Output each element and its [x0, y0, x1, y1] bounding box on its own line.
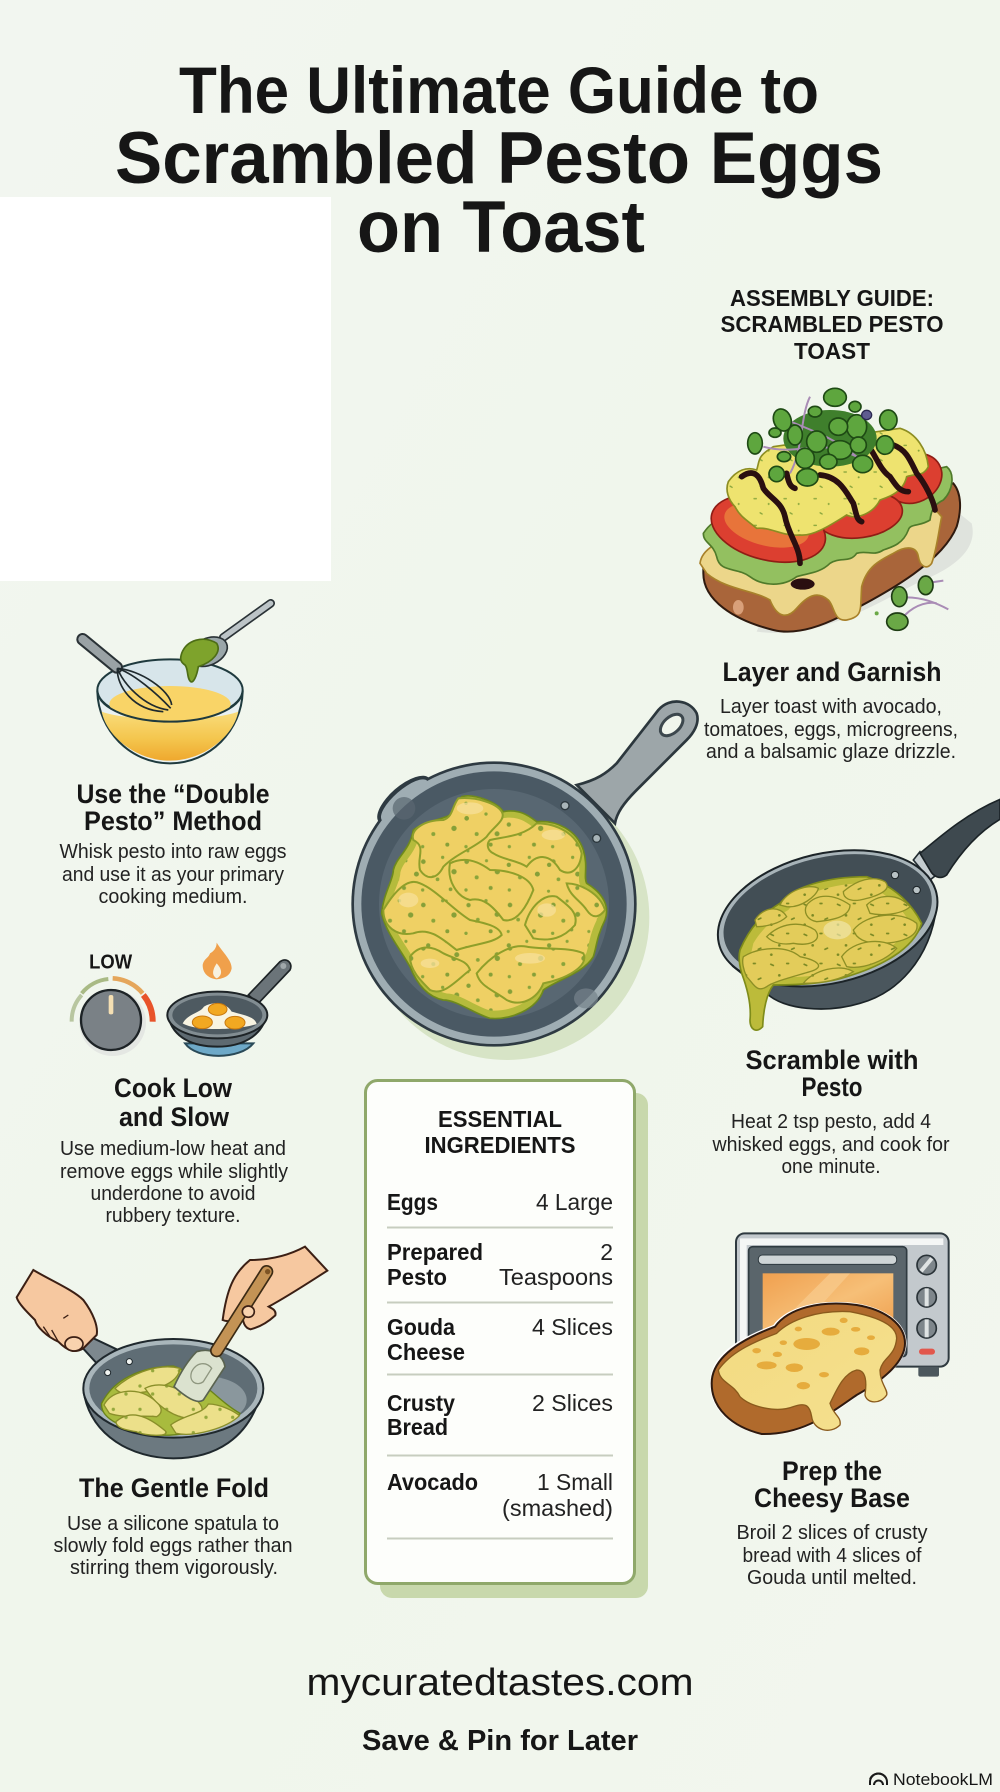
- footer call to action: Save & Pin for Later: [362, 1725, 638, 1757]
- card heading: [424, 1106, 576, 1158]
- cook low and slow step: rubbery texture.: [106, 1205, 240, 1227]
- cook low and slow step: remove eggs while slightly: [60, 1161, 288, 1183]
- row: gouda cheese: 4 Slices: [532, 1314, 613, 1340]
- gentle fold step: The Gentle Fold: [79, 1473, 269, 1503]
- title: Scrambled Pesto Eggs: [115, 118, 883, 199]
- assembly guide heading: [720, 285, 944, 364]
- row: prepared pesto: Teaspoons: [499, 1264, 613, 1290]
- double pesto step: Whisk pesto into raw eggs: [60, 841, 286, 863]
- row: crusty bread: [387, 1390, 613, 1440]
- prep the cheesy base step: [736, 1456, 928, 1589]
- gentle fold step: [54, 1473, 292, 1579]
- scramble with pesto step: Heat 2 tsp pesto, add 4: [731, 1111, 931, 1133]
- blank white patch: [0, 197, 331, 581]
- row: prepared pesto: [387, 1239, 613, 1290]
- row: gouda cheese: Gouda: [387, 1314, 455, 1340]
- layer and garnish step: tomatoes, eggs, microgreens,: [704, 719, 958, 741]
- scramble with pesto step: [712, 1045, 950, 1178]
- icon: toaster oven with cheesy toast: [710, 1233, 949, 1435]
- scramble with pesto step: Scramble with: [746, 1045, 918, 1075]
- prep the cheesy base step: bread with 4 slices of: [742, 1545, 922, 1567]
- row: gouda cheese: [387, 1314, 613, 1365]
- double pesto step: [60, 779, 286, 908]
- cook low and slow step: underdone to avoid: [90, 1183, 256, 1205]
- layer and garnish step: and a balsamic glaze drizzle.: [706, 741, 956, 763]
- double pesto step: Use the “Double: [76, 779, 270, 809]
- row: gouda cheese: Cheese: [387, 1339, 465, 1365]
- layer and garnish step: Layer and Garnish: [722, 657, 942, 687]
- row: avocado: [387, 1469, 613, 1521]
- prep the cheesy base step: Cheesy Base: [754, 1483, 910, 1513]
- row: avocado: 1 Small: [537, 1469, 613, 1495]
- assembly guide heading: TOAST: [794, 338, 870, 364]
- title: [115, 53, 883, 268]
- gentle fold step: slowly fold eggs rather than: [54, 1535, 292, 1557]
- icon: bowl, whisk and pesto spoon: [83, 603, 271, 763]
- row: avocado: (smashed): [502, 1495, 613, 1521]
- row: crusty bread: Crusty: [387, 1390, 455, 1416]
- icon: hero skillet of pesto eggs: [351, 702, 698, 1060]
- double pesto step: and use it as your primary: [62, 864, 284, 886]
- card heading: INGREDIENTS: [424, 1132, 576, 1158]
- row: eggs: Eggs: [387, 1189, 438, 1215]
- double pesto step: cooking medium.: [98, 886, 248, 908]
- prep the cheesy base step: Prep the: [782, 1456, 882, 1486]
- gentle fold step: Use a silicone spatula to: [67, 1513, 279, 1535]
- row: prepared pesto: 2: [600, 1239, 613, 1265]
- icon: assembled pesto toast: [700, 388, 973, 633]
- assembly guide heading: ASSEMBLY GUIDE:: [730, 285, 934, 311]
- prep the cheesy base step: Broil 2 slices of crusty: [736, 1522, 928, 1544]
- row: crusty bread: Bread: [387, 1414, 448, 1440]
- panel: essential ingredients card: [366, 1080, 648, 1598]
- title: on Toast: [357, 187, 645, 268]
- row: prepared pesto: Pesto: [387, 1264, 447, 1290]
- prep the cheesy base step: Gouda until melted.: [747, 1567, 917, 1589]
- icon: hands folding eggs in pan: [17, 1247, 327, 1458]
- cook low and slow step: Use medium-low heat and: [60, 1138, 286, 1160]
- row: eggs: [387, 1189, 613, 1215]
- row: eggs: 4 Large: [536, 1189, 613, 1215]
- scramble with pesto step: Pesto: [802, 1072, 862, 1102]
- row: crusty bread: 2 Slices: [532, 1390, 613, 1416]
- title: The Ultimate Guide to: [179, 53, 819, 127]
- scramble with pesto step: whisked eggs, and cook for: [712, 1134, 950, 1156]
- row: avocado: Avocado: [387, 1469, 478, 1495]
- footer website: mycuratedtastes.com: [306, 1662, 694, 1704]
- low label: LOW: [89, 951, 132, 973]
- cook low and slow step: [60, 1073, 288, 1227]
- cook low and slow step: and Slow: [119, 1102, 229, 1132]
- icon: pan with oozing pesto eggs: [704, 799, 1000, 1030]
- gentle fold step: stirring them vigorously.: [70, 1557, 278, 1579]
- layer and garnish step: Layer toast with avocado,: [720, 696, 942, 718]
- assembly guide heading: SCRAMBLED PESTO: [720, 311, 944, 337]
- row: prepared pesto: Prepared: [387, 1239, 483, 1265]
- card heading: ESSENTIAL: [438, 1106, 562, 1132]
- layer and garnish step: [704, 657, 958, 763]
- scramble with pesto step: one minute.: [782, 1156, 880, 1178]
- notebooklm watermark: NotebookLM: [893, 1770, 993, 1789]
- icon: low heat dial and pan on burner: [72, 943, 291, 1056]
- double pesto step: Pesto” Method: [84, 806, 262, 836]
- cook low and slow step: Cook Low: [114, 1073, 232, 1103]
